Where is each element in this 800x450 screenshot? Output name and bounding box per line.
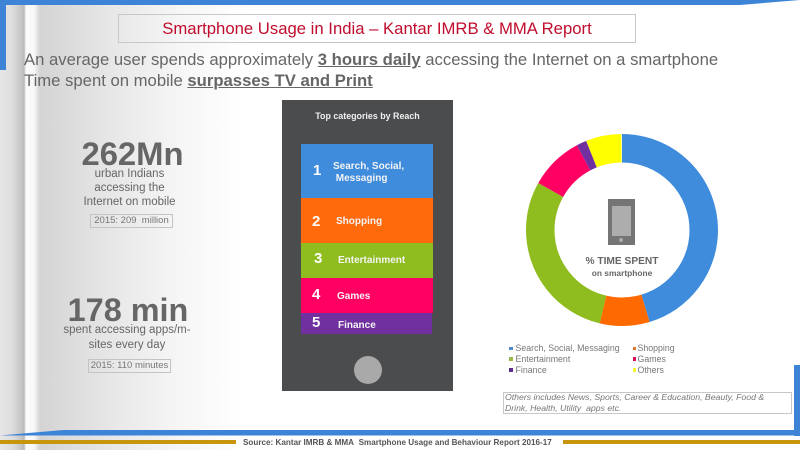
- title: Smartphone Usage in India – Kantar IMRB & MMA Report: [162, 19, 592, 38]
- legend: Finance: [516, 365, 547, 375]
- legend: [509, 343, 675, 375]
- stat value: 178 min: [68, 292, 188, 328]
- stat description: accessing the: [94, 182, 165, 194]
- category 1: search, social, messaging: Messaging: [336, 173, 387, 184]
- donut center label: % TIME SPENT: [585, 256, 659, 267]
- category 5: finance: 5: [312, 314, 320, 331]
- icon: smartphone: [608, 199, 635, 245]
- category 1: search, social, messaging: 1: [313, 162, 321, 179]
- stat description: sites every day: [89, 339, 165, 351]
- category 5: finance: [301, 313, 432, 334]
- donut chart: time spent: [526, 134, 718, 326]
- footnote: others: Drink, Health, Utility apps etc.: [505, 402, 621, 412]
- legend: Others: [638, 365, 664, 375]
- phone heading: Top categories by Reach: [315, 111, 420, 121]
- legend: Search, Social, Messaging: [516, 343, 620, 353]
- intro text: An average user spends approximately 3 hours daily accessing the Internet on a smartphone: [24, 50, 718, 69]
- stat: 178 minutes: [63, 292, 191, 373]
- intro text: [24, 50, 718, 90]
- stat value: 262Mn: [81, 135, 184, 172]
- stat description: [63, 324, 191, 351]
- category 3: entertainment: Entertainment: [338, 255, 405, 266]
- legend: Entertainment: [516, 354, 570, 364]
- category 1: search, social, messaging: [301, 144, 433, 198]
- footnote: others: [503, 392, 792, 414]
- category 1: search, social, messaging: Search, Social,: [333, 161, 404, 172]
- category 3: entertainment: 3: [314, 250, 322, 267]
- 2015 comparison: 2015: 110 minutes: [91, 360, 168, 371]
- category 2: shopping: [301, 198, 433, 243]
- footnote: others: Others includes News, Sports, Career & Education, Beauty, Food &: [505, 392, 764, 402]
- donut center label: [585, 256, 659, 278]
- category 4: games: Games: [337, 291, 370, 302]
- stat description: urban Indians: [95, 168, 164, 180]
- phone panel: top categories: [282, 100, 453, 391]
- stat description: spent accessing apps/m-: [63, 324, 191, 336]
- category 4: games: 4: [312, 286, 320, 303]
- stat description: [83, 168, 176, 208]
- category 4: games: [301, 278, 433, 313]
- stat description: Internet on mobile: [83, 196, 176, 208]
- legend: Games: [638, 354, 666, 364]
- donut center label: on smartphone: [592, 268, 652, 278]
- category 3: entertainment: [301, 243, 433, 278]
- stat: 262Mn users: [81, 135, 184, 228]
- home button: [354, 356, 382, 384]
- category 2: shopping: 2: [312, 213, 320, 230]
- title: [118, 14, 636, 43]
- category 2: shopping: Shopping: [336, 216, 382, 227]
- source line: Source: Kantar IMRB & MMA Smartphone Usage and Behaviour Report 2016-17: [243, 438, 552, 447]
- intro text: Time spent on mobile surpasses TV and Print: [24, 71, 373, 90]
- legend: Shopping: [638, 343, 675, 353]
- category 5: finance: Finance: [338, 320, 376, 331]
- 2015 comparison: 2015: 209 million: [94, 215, 169, 226]
